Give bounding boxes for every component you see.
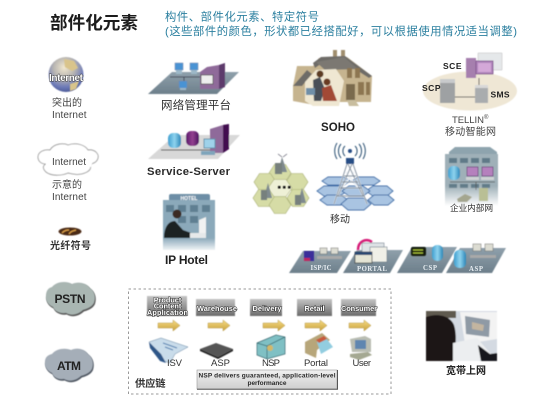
icon: PSTN cloud: PSTN [54, 292, 86, 306]
icon: Portal [305, 333, 333, 358]
icon: ASP [200, 343, 233, 359]
title: 部件化元素 [50, 13, 138, 33]
icon: User [350, 336, 372, 360]
step: Retail: Retail [304, 304, 324, 313]
label: 宽带上网 [446, 364, 486, 377]
label: schematic Internet: 示意的 [52, 178, 82, 191]
step: Product Content Application [147, 296, 188, 317]
step: Warehouse [196, 299, 237, 316]
label: CSP [423, 265, 437, 272]
icon: highlighted Internet globe: Internet [49, 73, 84, 84]
green cell towers [261, 154, 306, 205]
panel: network management platform [148, 63, 239, 112]
diagram labels [422, 61, 510, 100]
blue hex cells [317, 177, 394, 210]
hotel illustration: HOTEL [181, 196, 197, 202]
arrows between steps [158, 320, 371, 331]
router and database [411, 245, 443, 261]
label: TELLIN [452, 115, 484, 126]
labels under supply chain icons [167, 358, 371, 369]
server illustration [148, 124, 240, 159]
label: PORTAL [357, 266, 387, 273]
diagram labels: SCE [443, 61, 462, 71]
intelligent network diagram [423, 53, 517, 110]
step: Retail [297, 299, 332, 316]
panel: supply chain [128, 289, 391, 394]
panel: CSP platform [397, 245, 457, 273]
green hex cells [253, 164, 309, 214]
label: highlighted Internet: 突出的 [52, 96, 82, 109]
portal windows and curved arrow [355, 240, 387, 263]
house illustration [293, 50, 372, 106]
central tower with signal waves [334, 143, 367, 204]
step: Delivery: Delivery [252, 304, 282, 313]
label: 移动智能网 [445, 125, 496, 138]
label: ® [484, 114, 489, 121]
subtitle text block: (这些部件的颜色，形状都已经搭配好，可以根据使用情况适当调整) [165, 24, 517, 38]
icon: outline Internet cloud [38, 144, 98, 175]
callout: NSP guarantee [197, 370, 338, 389]
step: Consumer [341, 299, 377, 316]
label: schematic Internet: Internet [52, 192, 87, 203]
devices [304, 248, 342, 261]
panel: broadband access [426, 311, 497, 377]
icon: PSTN cloud [46, 282, 96, 316]
platform illustration [148, 63, 239, 94]
panel: TELLIN [422, 53, 517, 138]
label: 网络管理平台 [161, 98, 231, 112]
panel: PORTAL platform [343, 240, 403, 273]
panel: IP Hotel [163, 194, 215, 267]
label: SOHO [321, 122, 355, 134]
label: fiber symbol: 光纤符号 [50, 239, 91, 252]
icon: fiber symbol [58, 228, 82, 236]
label: schematic Internet [52, 178, 87, 203]
label: highlighted Internet [52, 96, 87, 121]
labels under supply chain icons: NSP [262, 358, 280, 369]
subtitle text block: 构件、部件化元素、特定符号 [165, 10, 319, 24]
label: Service-Server [147, 166, 231, 178]
labels under supply chain icons: Portal [304, 358, 328, 369]
callout: NSP guarantee: NSP delivers guaranteed, application-level [198, 372, 336, 380]
label: IP Hotel [165, 253, 208, 267]
diagram labels: SCP [422, 83, 441, 93]
panel: mobile [253, 143, 394, 226]
subtitle text block [165, 10, 517, 38]
diagram labels: SMS [490, 90, 510, 100]
label: 移动 [330, 212, 350, 226]
label: highlighted Internet: Internet [52, 110, 87, 121]
office building illustration [445, 147, 498, 206]
icon: ISV [149, 338, 188, 363]
panel: enterprise intranet [445, 147, 498, 213]
icon: outline Internet cloud: Internet [52, 157, 86, 168]
photo [426, 311, 497, 361]
database and terminals [454, 244, 496, 268]
labels under supply chain icons: ISV [167, 358, 183, 369]
dashed frame [128, 289, 391, 394]
label: ASP [469, 266, 483, 273]
step: Product Content Application: Product [154, 296, 182, 304]
panel: ASP platform [446, 244, 506, 273]
icon: ATM cloud: ATM [57, 359, 81, 373]
labels under supply chain icons: ASP [211, 358, 230, 369]
icon: NSP [257, 335, 285, 359]
panel: service-server [147, 124, 240, 178]
supply chain label: 供应链 [135, 377, 166, 390]
step: Warehouse: Warehouse [197, 304, 237, 313]
label [445, 114, 496, 138]
icon: highlighted Internet globe [48, 57, 84, 92]
step: Consumer: Consumer [341, 304, 377, 313]
labels under supply chain icons: User [352, 358, 371, 369]
step: Product Content Application: Application [147, 308, 188, 317]
step: Delivery [250, 299, 282, 316]
label: 企业内部网 [450, 202, 493, 213]
icon: ATM cloud [45, 349, 94, 382]
callout: NSP guarantee: performance [248, 380, 287, 387]
panel: ISP/IC platform [289, 248, 351, 273]
panel: SOHO [293, 50, 372, 134]
label: ISP/IC [310, 265, 332, 272]
step: Product Content Application: Content [154, 302, 182, 311]
